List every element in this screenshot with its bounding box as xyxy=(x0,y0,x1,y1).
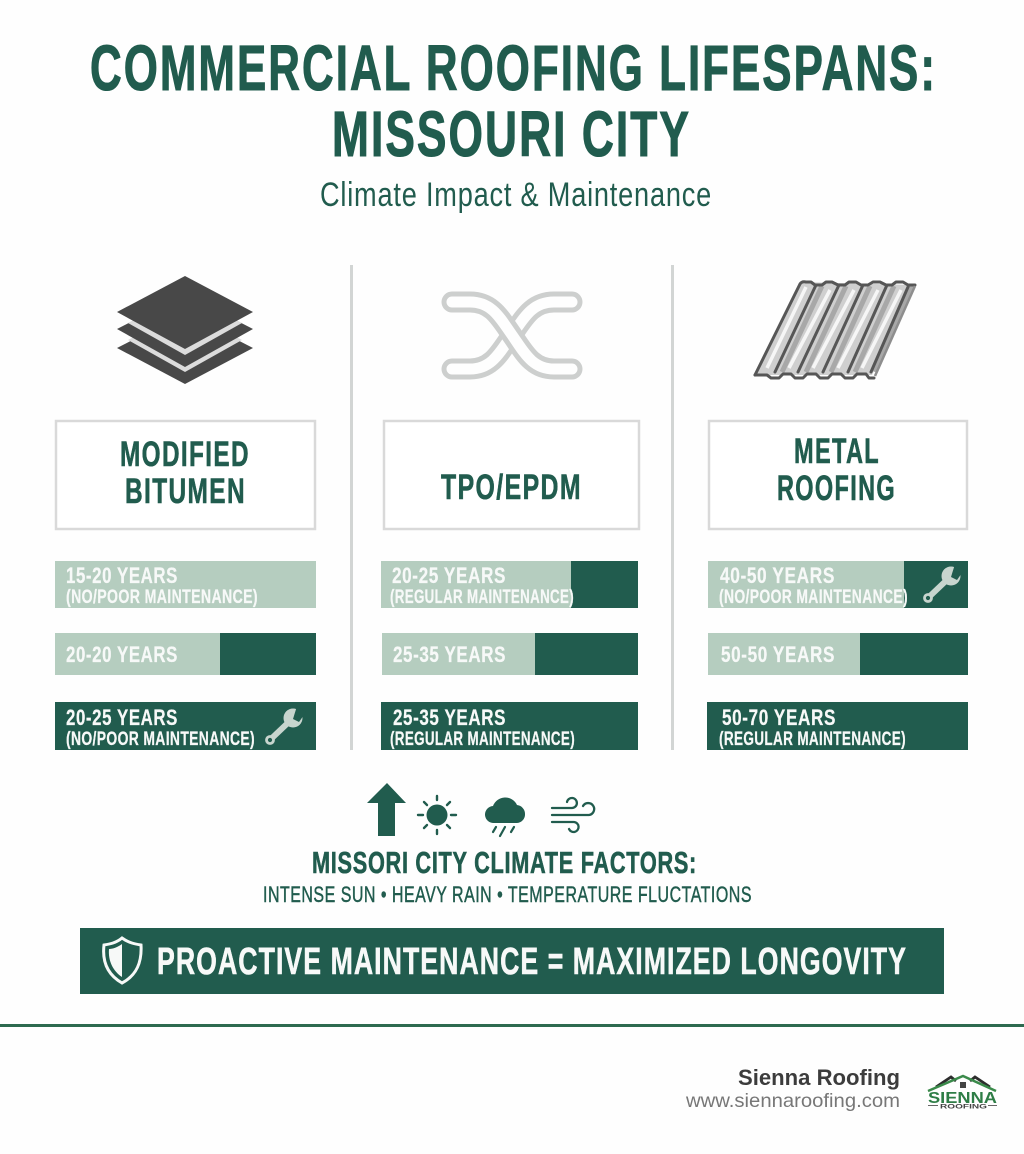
callout banner xyxy=(80,928,944,994)
material label box: MODIFIED xyxy=(120,435,250,474)
footer logo xyxy=(928,1076,998,1110)
lifespan bar 3: (NO/POOR MAINTENANCE) xyxy=(66,728,255,750)
lifespan bar 2 xyxy=(382,633,638,675)
material label box xyxy=(384,421,639,529)
lifespan bar 3: 20-25 YEARS xyxy=(66,705,178,730)
lifespan bar 1: (NO/POOR MAINTENANCE) xyxy=(719,586,908,608)
material label box: TPO/EPDM xyxy=(441,468,582,507)
panel: TPO/EPDM xyxy=(381,302,639,750)
lifespan bar 1 xyxy=(708,561,968,608)
material label box: METAL xyxy=(794,432,880,471)
lifespan bar 3: 25-35 YEARS xyxy=(393,705,506,730)
icon: stacked membrane layers xyxy=(117,276,253,384)
icon: corrugated metal sheet xyxy=(755,282,915,378)
lifespan bar 3: 50-70 YEARS xyxy=(722,705,836,730)
icon: wrench xyxy=(924,564,964,602)
icon: wrench xyxy=(266,706,306,744)
icon: rain cloud xyxy=(485,797,525,836)
panel: metal roofing xyxy=(707,282,968,750)
lifespan bar 3 xyxy=(381,702,638,750)
lifespan bar 3: (REGULAR MAINTENANCE) xyxy=(719,728,906,750)
lifespan bar 1: 20-25 YEARS xyxy=(392,563,506,588)
lifespan bar 2: 25-35 YEARS xyxy=(393,642,506,667)
icon: crossed membrane outline xyxy=(452,302,572,369)
subtitle: Climate Impact & Maintenance xyxy=(320,176,712,214)
lifespan bar 1: 15-20 YEARS xyxy=(66,563,178,588)
icon: up arrow xyxy=(367,783,406,836)
icon: wind xyxy=(552,798,594,832)
lifespan bar 2 xyxy=(55,633,316,675)
material label box: ROOFING xyxy=(777,469,896,508)
climate factors list: INTENSE SUN • HEAVY RAIN • TEMPERATURE FLUCTATIONS xyxy=(263,882,752,907)
climate icons xyxy=(367,783,594,836)
title xyxy=(90,32,937,170)
lifespan bar 1 xyxy=(55,561,316,608)
panel: modified bitumen xyxy=(55,276,316,750)
lifespan bar 1: (REGULAR MAINTENANCE) xyxy=(390,586,574,608)
lifespan bar 1 xyxy=(381,561,638,608)
lifespan bar 1: 40-50 YEARS xyxy=(720,563,835,588)
material label box xyxy=(56,421,315,529)
footer brand name: Sienna Roofing xyxy=(738,1065,900,1090)
material label box xyxy=(709,421,967,529)
climate heading: MISSORI CITY CLIMATE FACTORS: xyxy=(312,845,697,880)
footer logo: SIENNA xyxy=(928,1090,998,1107)
material label box: BITUMEN xyxy=(125,472,246,511)
lifespan bar 3 xyxy=(55,702,316,750)
footer logo: ROOFING xyxy=(940,1104,987,1110)
title: MISSOURI CITY xyxy=(332,98,691,170)
icon: shield xyxy=(104,938,141,983)
lifespan bar 1: (NO/POOR MAINTENANCE) xyxy=(66,586,258,608)
lifespan bar 3 xyxy=(707,702,968,750)
footer website: www.siennaroofing.com xyxy=(685,1090,900,1112)
lifespan bar 2: 50-50 YEARS xyxy=(721,642,835,667)
icon: sun xyxy=(418,796,456,834)
lifespan bar 3: (REGULAR MAINTENANCE) xyxy=(390,728,575,750)
lifespan bar 2: 20-20 YEARS xyxy=(66,642,178,667)
lifespan bar 2 xyxy=(708,633,968,675)
